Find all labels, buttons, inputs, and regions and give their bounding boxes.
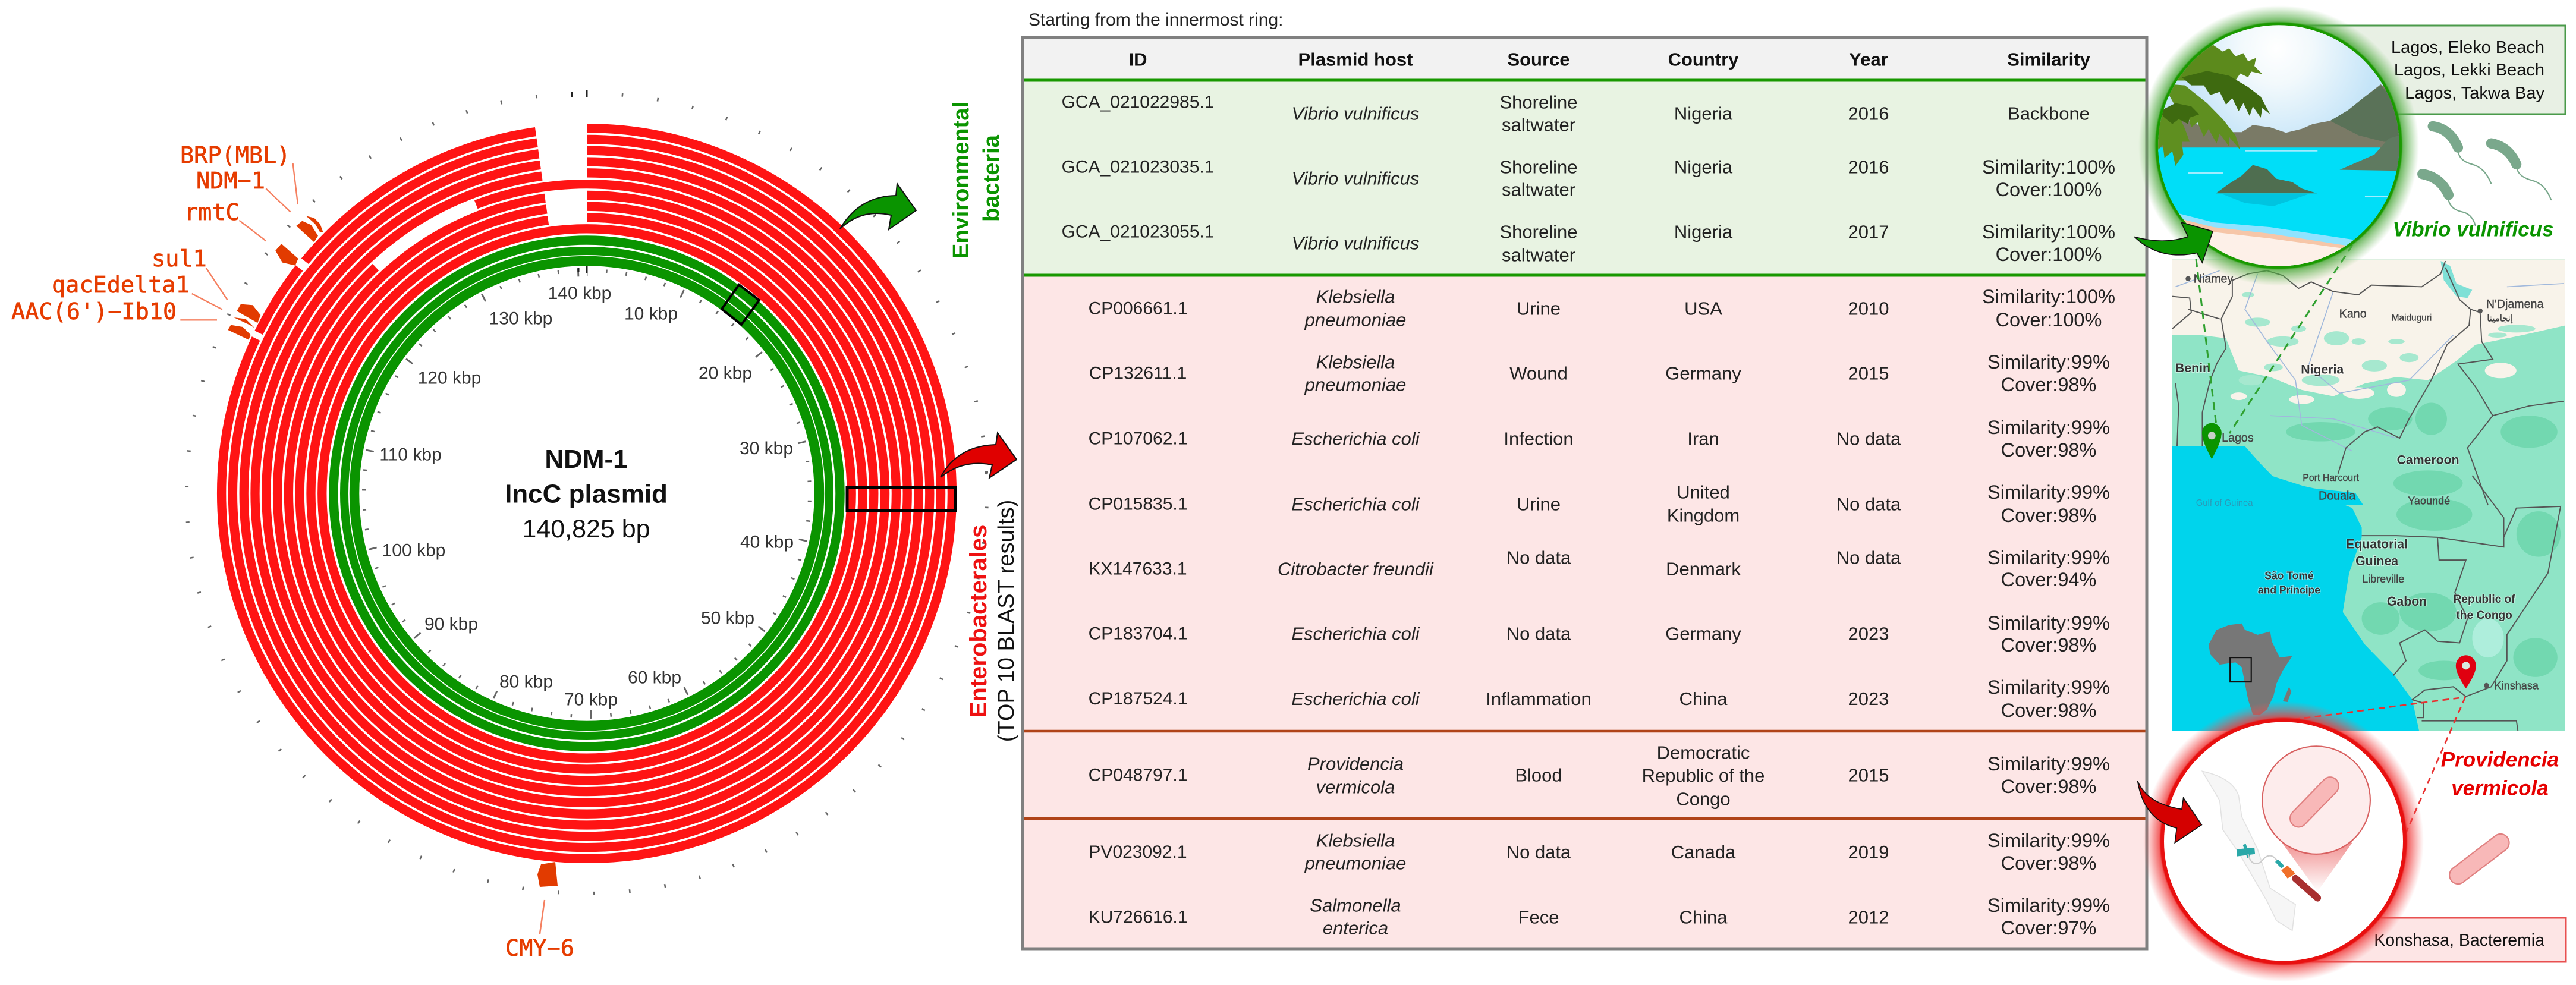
row: PV023092.1: PV023092.1 — [1089, 842, 1187, 862]
row: KU726616.1: Cover:97% — [2001, 917, 2096, 939]
table header: Year — [1849, 49, 1888, 70]
row: CP015835.1: Similarity:99% — [1987, 482, 2110, 503]
label: Providencia vermicola: vermicola — [2451, 776, 2549, 800]
row: KU726616.1: Fece — [1518, 907, 1559, 927]
row: CP187524.1: Cover:98% — [2001, 700, 2096, 721]
map place labels north — [2175, 272, 2544, 506]
map place labels north: Lagos — [2222, 432, 2254, 445]
row: CP107062.1: No data — [1836, 428, 1901, 449]
icon: blood culture in circle — [2143, 701, 2424, 982]
row: GCA_021023035.1: Nigeria — [1674, 157, 1733, 177]
sea — [2172, 446, 2363, 505]
row: CP006661.1: Cover:100% — [1996, 309, 2102, 331]
row: CP006661.1: USA — [1684, 298, 1722, 319]
map place labels north: Yaoundé — [2408, 494, 2450, 506]
row: CP006661.1: pneumoniae — [1304, 309, 1406, 331]
map place labels south: Equatorial — [2346, 536, 2408, 551]
box: Lagos sampling sites — [2277, 26, 2565, 114]
coordinate labels: 90 kbp — [424, 615, 478, 634]
row: CP132611.1: Wound — [1509, 363, 1568, 384]
row: CP048797.1: Congo — [1676, 788, 1731, 810]
row: CP183704.1: 2023 — [1848, 623, 1889, 644]
row: GCA_021023055.1: Cover:100% — [1996, 244, 2102, 265]
row: CP107062.1: Similarity:99% — [1987, 417, 2110, 438]
gene labels: AAC(6')−Ib10 — [11, 298, 177, 325]
row: PV023092.1: 2019 — [1848, 842, 1889, 863]
red glow ring — [2143, 701, 2424, 982]
rivers — [2175, 270, 2564, 451]
row: GCA_021022985.1: Nigeria — [1674, 103, 1733, 124]
row: KU726616.1 — [1089, 895, 2110, 939]
row: CP107062.1: Iran — [1687, 428, 1719, 449]
table backgrounds — [1023, 37, 2147, 949]
row: CP132611.1: pneumoniae — [1304, 375, 1406, 395]
row: GCA_021023055.1: saltwater — [1502, 245, 1575, 265]
dashed leaders to Kinshasa — [2283, 697, 2465, 833]
green location pin: Lagos — [2202, 423, 2222, 459]
white disc — [2164, 722, 2403, 961]
alignment gaps in red rings — [256, 121, 587, 339]
row: GCA_021022985.1: Vibrio vulnificus — [1292, 103, 1419, 124]
table header: Source — [1507, 49, 1570, 70]
map place labels south — [2196, 498, 2539, 692]
row: KX147633.1: Citrobacter freundii — [1278, 559, 1434, 579]
dashed leaders to Lagos — [2196, 245, 2352, 433]
table caption: Starting from the innermost ring: — [1028, 10, 1284, 30]
southern land texture — [2362, 498, 2561, 680]
map place labels north: Kano — [2339, 307, 2367, 321]
row: KX147633.1: Cover:94% — [2001, 569, 2096, 590]
arrow: red to blood culture — [2138, 781, 2201, 843]
map place labels north: Cameroon — [2397, 452, 2459, 467]
row: GCA_021023035.1: Cover:100% — [1996, 179, 2102, 200]
row: CP015835.1: Escherichia coli — [1291, 493, 1420, 515]
label: Enterobacterales — [965, 500, 1019, 742]
row: CP132611.1: Similarity:99% — [1987, 351, 2110, 373]
row: KU726616.1: enterica — [1323, 918, 1388, 938]
center title — [505, 445, 668, 543]
row: PV023092.1: Similarity:99% — [1987, 830, 2110, 851]
map place labels south: the Congo — [2456, 609, 2512, 622]
row: CP107062.1: CP107062.1 — [1089, 429, 1187, 448]
coordinate labels — [379, 284, 794, 710]
row: KX147633.1: Denmark — [1666, 559, 1741, 579]
highlight box on green rings — [722, 285, 759, 325]
panel: BLAST table — [1023, 37, 2147, 949]
label: Enterobacterales: (TOP 10 BLAST results) — [994, 500, 1019, 742]
row: CP183704.1: No data — [1506, 623, 1571, 644]
row: PV023092.1: pneumoniae — [1304, 852, 1406, 874]
row: GCA_021023035.1: saltwater — [1502, 180, 1575, 200]
row: GCA_021023055.1: GCA_021023055.1 — [1062, 222, 1214, 241]
coordinate labels: 50 kbp — [701, 609, 754, 628]
row: CP132611.1 — [1089, 351, 2110, 395]
label: Providencia vermicola — [2441, 748, 2559, 800]
table header — [1128, 49, 2091, 70]
row: CP107062.1: Escherichia coli — [1291, 428, 1420, 449]
map place labels north: Maiduguri — [2392, 313, 2432, 323]
red Enterobacterales rings — [222, 128, 952, 858]
coordinate labels: 40 kbp — [740, 533, 794, 552]
row: GCA_021023055.1: 2017 — [1848, 221, 1889, 243]
row: CP048797.1: Blood — [1515, 764, 1562, 786]
table header: Plasmid host — [1298, 49, 1413, 70]
icon: beach scene in circle — [2138, 5, 2419, 286]
row: GCA_021023035.1: Vibrio vulnificus — [1292, 168, 1419, 189]
row: PV023092.1: Canada — [1671, 842, 1736, 863]
row: CP132611.1: 2015 — [1848, 363, 1889, 384]
gene: CMY-6 — [537, 862, 558, 887]
row: CP006661.1: Urine — [1517, 298, 1561, 319]
gene labels: NDM−1 — [196, 168, 265, 194]
label: Vibrio vulnificus: Vibrio vulnificus — [2393, 218, 2553, 241]
coordinate labels: 10 kbp — [624, 304, 678, 323]
land base — [2172, 259, 2565, 731]
coordinate labels: 70 kbp — [564, 690, 618, 710]
row: CP132611.1: Klebsiella — [1316, 352, 1395, 372]
sea south — [2172, 473, 2420, 735]
center title: IncC plasmid — [505, 479, 668, 509]
row: GCA_021023035.1: Similarity:100% — [1982, 156, 2115, 178]
row: KU726616.1: KU726616.1 — [1089, 907, 1187, 927]
row: GCA_021023035.1 — [1062, 156, 2115, 200]
row: CP048797.1: CP048797.1 — [1089, 766, 1187, 785]
row: CP183704.1: CP183704.1 — [1089, 624, 1187, 643]
row: CP187524.1: 2023 — [1848, 688, 1889, 709]
row: CP107062.1 — [1089, 417, 2110, 461]
label: Environmental bacteria: Environmental — [949, 102, 974, 259]
row: KU726616.1: 2012 — [1848, 907, 1889, 927]
row: GCA_021022985.1: saltwater — [1502, 114, 1575, 136]
outer tick marks — [187, 93, 987, 893]
highlight box on red rings — [847, 487, 955, 511]
row: CP048797.1: 2015 — [1848, 764, 1889, 786]
national borders north — [2172, 261, 2564, 505]
row: CP132611.1: Germany — [1665, 363, 1741, 384]
map place labels north: N'Djamena — [2486, 298, 2544, 311]
map place labels north: Douala — [2319, 490, 2356, 503]
map place labels south: Gulf of Guinea — [2196, 498, 2253, 508]
table header: Similarity — [2007, 49, 2091, 70]
beach illustration — [2156, 23, 2403, 274]
row: PV023092.1: Cover:98% — [2001, 852, 2096, 874]
gene leader lines — [180, 163, 298, 320]
row: CP015835.1: Urine — [1517, 493, 1561, 515]
coordinate labels: 110 kbp — [379, 445, 442, 465]
row: GCA_021022985.1: Backbone — [2008, 103, 2090, 124]
inner tick marks — [364, 270, 810, 716]
row: CP187524.1: Escherichia coli — [1291, 688, 1420, 709]
row: CP015835.1: Kingdom — [1667, 505, 1740, 525]
row: GCA_021023055.1: Vibrio vulnificus — [1292, 233, 1419, 253]
gene labels — [11, 142, 574, 962]
row: GCA_021022985.1: 2016 — [1848, 103, 1889, 124]
table header: ID — [1128, 49, 1147, 70]
coordinate labels: 140 kbp — [548, 284, 611, 303]
row: PV023092.1: Klebsiella — [1316, 830, 1395, 851]
national borders south — [2362, 476, 2561, 731]
label: Enterobacterales: Enterobacterales — [965, 525, 992, 717]
row: CP132611.1: Cover:98% — [2001, 374, 2096, 395]
row: GCA_021023055.1: Similarity:100% — [1982, 221, 2115, 243]
row: CP183704.1: Escherichia coli — [1291, 623, 1420, 644]
label: Environmental bacteria: bacteria — [979, 134, 1004, 222]
row: GCA_021022985.1 — [1062, 92, 2090, 136]
box: Konshasa bacteremia — [2307, 918, 2566, 962]
map place labels north: Benin — [2175, 361, 2210, 375]
Africa locator — [2209, 624, 2292, 715]
center title: NDM-1 — [545, 445, 628, 474]
row: KU726616.1: Salmonella — [1310, 895, 1401, 915]
table separators — [1023, 37, 2147, 949]
row: KX147633.1: KX147633.1 — [1089, 559, 1187, 579]
top position ticks — [572, 90, 587, 273]
row: CP015835.1: No data — [1836, 493, 1901, 515]
row: CP187524.1: CP187524.1 — [1089, 689, 1187, 709]
row: CP006661.1: Similarity:100% — [1982, 286, 2115, 307]
gene labels: CMY−6 — [505, 935, 574, 962]
coordinate labels: 80 kbp — [499, 672, 553, 692]
coordinate labels: 120 kbp — [418, 369, 481, 388]
row: GCA_021023035.1: 2016 — [1848, 157, 1889, 177]
gene labels: BRP(MBL) — [180, 142, 290, 169]
coordinate labels: 20 kbp — [699, 364, 752, 383]
gene labels: qacEdelta1 — [52, 272, 190, 298]
row: GCA_021023035.1: Shoreline — [1500, 157, 1577, 177]
row: PV023092.1 — [1089, 830, 2110, 874]
map place labels south: São Tomé — [2264, 569, 2314, 581]
box: Lagos sampling sites: Lagos, Lekki Beach — [2394, 61, 2544, 80]
row: CP006661.1: 2010 — [1848, 298, 1889, 319]
row: CP183704.1: Similarity:99% — [1987, 612, 2110, 634]
row: CP006661.1: Klebsiella — [1316, 287, 1395, 307]
gene labels: sul1 — [152, 246, 207, 272]
map place labels south: and Príncipe — [2258, 584, 2320, 596]
row: CP048797.1: Providencia — [1307, 754, 1404, 774]
row: CP107062.1: Infection — [1504, 428, 1574, 449]
row: CP048797.1: Republic of the — [1642, 765, 1764, 786]
map place labels south: Guinea — [2355, 553, 2399, 568]
row: CP048797.1: Cover:98% — [2001, 776, 2096, 797]
map place labels south: Kinshasa — [2495, 679, 2539, 692]
arrow: green to environmental bacteria — [840, 184, 916, 229]
box: Lagos sampling sites: Lagos, Takwa Bay — [2405, 84, 2544, 103]
label: Providencia vermicola: Providencia — [2441, 748, 2559, 772]
northern arid land and vegetation — [2172, 259, 2565, 496]
row: CP015835.1: United — [1677, 482, 1730, 503]
row: GCA_021022985.1: GCA_021022985.1 — [1062, 93, 1214, 112]
row: CP048797.1 — [1089, 742, 2110, 810]
row: CP015835.1: CP015835.1 — [1089, 495, 1187, 514]
row: CP015835.1 — [1089, 482, 2110, 526]
icon: Vibrio bacteria — [2423, 126, 2551, 225]
map place labels south: Republic of — [2454, 593, 2515, 606]
green glow ring — [2138, 5, 2419, 286]
box: Konshasa bacteremia: Konshasa, Bacteremia — [2374, 931, 2544, 950]
icon: Providencia bacterium — [2458, 843, 2500, 875]
row: CP048797.1: Democratic — [1657, 742, 1750, 763]
blood draw illustration — [2202, 746, 2370, 930]
box: Lagos sampling sites: Lagos, Eleko Beach — [2391, 38, 2544, 57]
map place labels north: إنجامينا — [2487, 313, 2513, 324]
center title: 140,825 bp — [522, 515, 650, 543]
CMY-6 leader — [540, 900, 545, 934]
row: CP183704.1: Cover:98% — [2001, 634, 2096, 656]
row: CP132611.1: CP132611.1 — [1089, 364, 1187, 383]
coordinate labels: 100 kbp — [382, 541, 445, 560]
row: KX147633.1 — [1089, 547, 2110, 590]
row: CP048797.1: vermicola — [1316, 776, 1395, 798]
coordinate labels: 130 kbp — [489, 309, 552, 328]
coordinate labels: 30 kbp — [740, 439, 793, 458]
row: PV023092.1: No data — [1506, 842, 1571, 863]
row: GCA_021023035.1: GCA_021023035.1 — [1062, 157, 1214, 177]
gene labels: rmtC — [184, 199, 240, 226]
row: CP187524.1: China — [1679, 688, 1728, 709]
red location pin: Kinshasa — [2456, 655, 2476, 688]
row: GCA_021023055.1 — [1062, 221, 2115, 265]
row: CP187524.1: Inflammation — [1486, 688, 1591, 709]
row: GCA_021023055.1: Shoreline — [1500, 221, 1577, 243]
row: CP048797.1: Similarity:99% — [1987, 753, 2110, 775]
row: CP006661.1: CP006661.1 — [1089, 298, 1187, 319]
map place labels north: Niamey — [2194, 272, 2233, 285]
green Vibrio rings — [334, 240, 840, 747]
resistance genes — [228, 216, 323, 340]
row: CP107062.1: Cover:98% — [2001, 439, 2096, 461]
arrow: red to Enterobacterales — [941, 433, 1017, 478]
panel: circular plasmid map — [11, 90, 987, 962]
row: KX147633.1: No data — [1506, 547, 1571, 568]
coordinate labels: 60 kbp — [628, 668, 681, 687]
map place labels south: Libreville — [2362, 572, 2404, 585]
panel: map of West/Central Africa — [2172, 259, 2565, 735]
map place labels south: Gabon — [2387, 594, 2427, 609]
row: KU726616.1: Similarity:99% — [1987, 895, 2110, 916]
row: KX147633.1: Similarity:99% — [1987, 547, 2110, 568]
map place labels north: Nigeria — [2301, 363, 2344, 377]
arrow: green to beach — [2134, 222, 2213, 263]
row: CP183704.1: Germany — [1665, 623, 1741, 644]
row: CP187524.1 — [1089, 676, 2110, 721]
row: CP006661.1 — [1089, 286, 2115, 331]
row: CP015835.1: Cover:98% — [2001, 505, 2096, 526]
map place labels north: Port Harcourt — [2303, 473, 2359, 483]
label: Environmental bacteria — [949, 102, 1004, 259]
row: GCA_021022985.1: Shoreline — [1500, 92, 1577, 113]
table header: Country — [1668, 49, 1739, 70]
row: KU726616.1: China — [1679, 907, 1728, 927]
row: CP187524.1: Similarity:99% — [1987, 676, 2110, 698]
row: KX147633.1: No data — [1836, 547, 1901, 568]
row: GCA_021023055.1: Nigeria — [1674, 221, 1733, 243]
row: CP183704.1 — [1089, 612, 2110, 656]
